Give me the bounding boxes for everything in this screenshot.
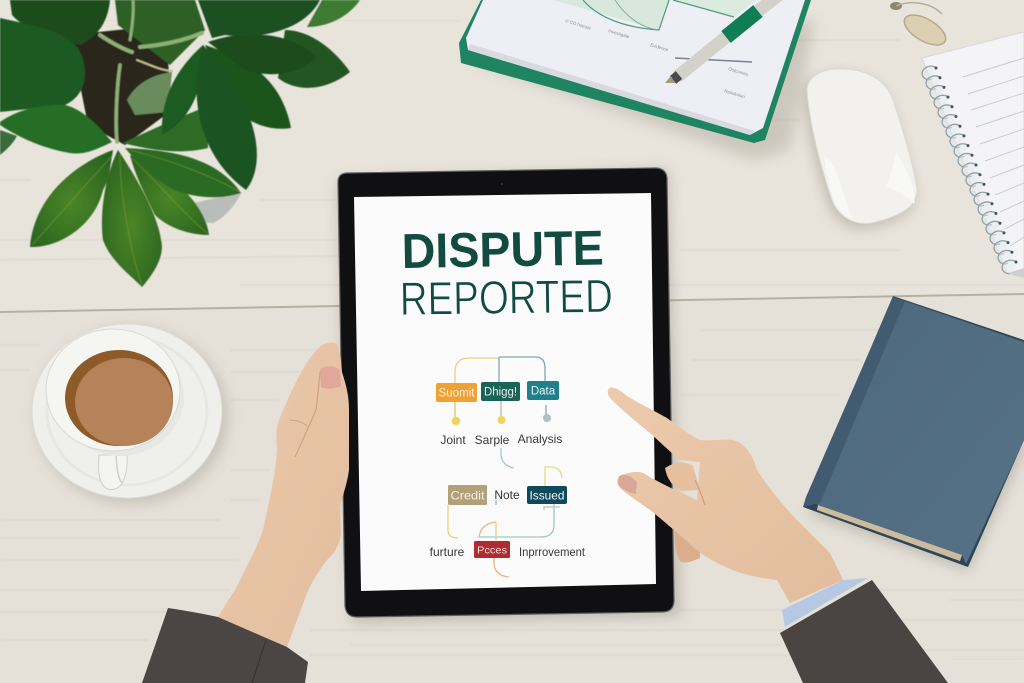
title: DISPUTE — [401, 221, 604, 279]
spiral notebook — [922, 32, 1024, 278]
box: issued: Issued — [530, 488, 564, 502]
flowchart: credit note issued, process improvement — [430, 467, 586, 577]
lower leaves — [123, 108, 208, 151]
cup body — [56, 336, 184, 456]
box: dhiggl: Dhigg! — [484, 386, 517, 398]
box: data: Data — [531, 386, 556, 398]
shirt cuff — [782, 578, 868, 627]
spiral binding — [922, 66, 1018, 274]
saucer — [32, 324, 222, 498]
back fingers — [665, 462, 700, 491]
coffee cup on saucer — [32, 324, 228, 504]
camera — [501, 183, 503, 185]
screen — [354, 193, 656, 591]
pot — [150, 192, 242, 223]
green notebook with chart — [459, 0, 815, 160]
pen — [665, 0, 785, 83]
tablet body — [338, 168, 674, 617]
thumbnail — [320, 366, 341, 389]
chart on notebook page: Evidence — [650, 42, 669, 53]
title: REPORTED — [399, 269, 613, 325]
chart on notebook page: Outcomes — [728, 66, 749, 77]
box: issued — [527, 486, 567, 504]
title — [399, 221, 613, 325]
flowchart: submit, dhiggl, data — [436, 357, 562, 468]
label: future: furture — [430, 545, 465, 559]
left suit sleeve — [142, 608, 308, 683]
step labels: Sarple — [475, 433, 510, 447]
right hand pointing at tablet — [608, 388, 948, 683]
step dots — [452, 414, 551, 425]
computer mouse — [804, 69, 917, 228]
wood knot — [890, 2, 950, 51]
step labels: Joint — [440, 433, 466, 447]
label: improvement: Inprrovement — [519, 545, 586, 559]
chart on notebook page: Investigate — [608, 28, 630, 39]
hand and index finger — [608, 388, 843, 603]
tablet — [338, 168, 680, 622]
step labels — [440, 432, 562, 447]
chart on notebook page: © CO hotrate — [565, 17, 592, 31]
right suit sleeve — [780, 580, 948, 683]
chart on notebook page: Resolution — [724, 88, 746, 99]
chart on notebook page — [553, 0, 756, 99]
cup handle — [99, 455, 127, 489]
dark upper-right leaves — [278, 30, 350, 88]
thumbnail — [618, 475, 637, 494]
step labels: Analysis — [518, 432, 562, 446]
potted plant — [0, 0, 360, 287]
leaf veins — [32, 150, 240, 285]
horizontal left leaf — [0, 105, 112, 153]
coffee — [65, 350, 173, 446]
ruled lines — [963, 58, 1024, 246]
box: process — [474, 541, 510, 558]
upper-left leaves — [10, 0, 110, 45]
box: submit: Suomit — [438, 388, 475, 400]
label: note: Note — [494, 488, 520, 502]
box: process: Pcces — [477, 544, 507, 556]
box: credit: Credit — [450, 488, 485, 502]
box: credit — [448, 485, 487, 505]
soil and moss — [70, 25, 172, 145]
left hand holding tablet — [142, 342, 349, 683]
blue hardcover book — [803, 296, 1024, 570]
stems — [100, 0, 202, 142]
